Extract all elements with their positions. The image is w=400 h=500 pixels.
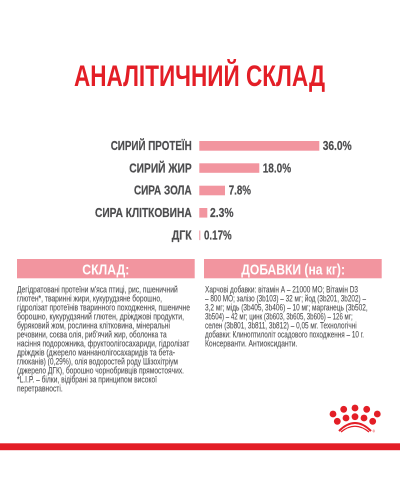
- row: DHA: ДГК: [172, 228, 192, 242]
- row: crude ash: СИРА ЗОЛА: [134, 183, 192, 198]
- footer band: [0, 443, 400, 450]
- row: crude fat: [129, 160, 292, 175]
- panel: composition: [17, 259, 195, 394]
- text block: composition: гідролізат протеїнів тваринного походження, пшеничне: [17, 303, 190, 313]
- panel: additives: [204, 259, 382, 348]
- row: crude fat: 18.0%: [263, 160, 292, 175]
- icon: royal crown logo: ®: [372, 430, 376, 434]
- text block: composition: речовини, соєва олія, риб'ячий жир, оболонка та: [17, 330, 167, 340]
- text block: additives: Консерванти. Антиоксиданти.: [205, 338, 297, 348]
- text block: composition: борошно, кукурудзяний глютен, дріжджові продукти,: [17, 312, 184, 322]
- bar chart: [95, 138, 352, 242]
- heading: additives: ДОБАВКИ (на кг):: [241, 262, 345, 278]
- row: DHA: [172, 228, 232, 242]
- heading: composition: [17, 259, 195, 278]
- icon: royal crown logo: [330, 405, 381, 434]
- heading: additives: [204, 259, 382, 278]
- text block: composition: (джерело ДГК), борошно чорнобривців прямостоячих.: [17, 366, 184, 376]
- row: crude ash: [134, 183, 251, 198]
- text block: composition: перетравності.: [17, 384, 63, 394]
- row: crude protein: СИРИЙ ПРОТЕЇН: [111, 138, 192, 153]
- text block: additives: [205, 284, 368, 348]
- row: crude fibre: СИРА КЛІТКОВИНА: [95, 205, 192, 220]
- row: crude ash: 7.8%: [229, 183, 251, 198]
- text block: composition: глютен*, тваринні жири, кукурудзяне борошно,: [17, 294, 162, 304]
- row: crude fat: СИРИЙ ЖИР: [129, 160, 192, 175]
- text block: composition: буряковий жом, рослинна клітковина, мінеральні: [17, 321, 170, 331]
- row: crude protein: [111, 138, 352, 153]
- text block: composition: *L.I.P. – білки, відібрані за принципом високої: [17, 375, 157, 385]
- row: crude fibre: 2.3%: [210, 205, 234, 220]
- heading: composition: СКЛАД:: [82, 262, 129, 278]
- text block: composition: насіння подорожника, фруктоолігосахариди, гідролізат: [17, 339, 189, 349]
- text block: composition: дріжджів (джерело маннанолігосахаридів та бета-: [17, 348, 175, 358]
- row: crude protein: 36.0%: [323, 138, 352, 153]
- text block: composition: глюканів) (0,29%), олія водоростей роду Шізохітріум: [17, 357, 178, 367]
- title: АНАЛІТИЧНИЙ СКЛАД: [74, 59, 325, 93]
- row: DHA: 0.17%: [204, 228, 232, 242]
- text block: composition: [17, 285, 190, 394]
- text block: composition: Дегідратовані протеїни м'яса птиці, рис, пшеничний: [17, 285, 178, 295]
